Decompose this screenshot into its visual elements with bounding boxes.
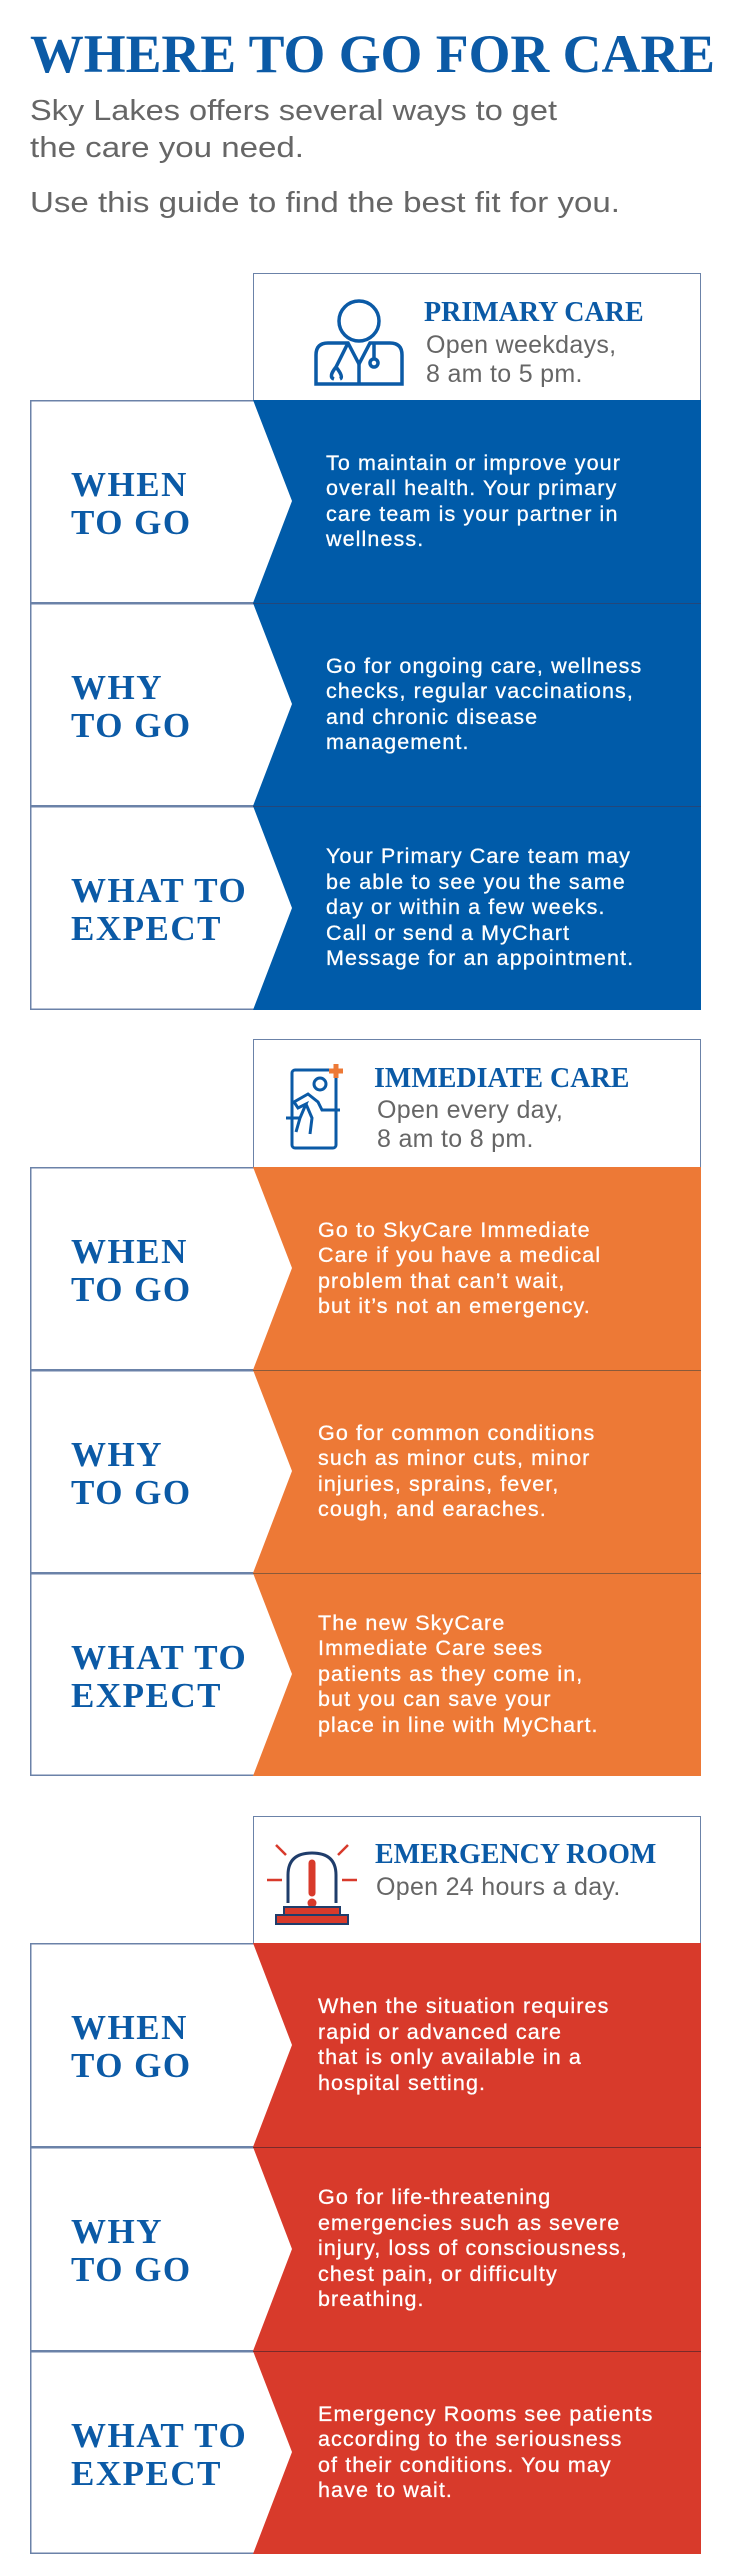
emergency room header: [253, 1816, 701, 1943]
hours: [377, 1096, 563, 1153]
row: why to go: management.: [326, 730, 470, 754]
row: why to go: injuries, sprains, fever,: [318, 1472, 559, 1496]
row: what to expect: have to wait.: [318, 2478, 453, 2502]
subtitle: [30, 95, 620, 219]
row: why to go: WHY: [71, 2212, 163, 2251]
hours: Open weekdays,: [426, 331, 616, 359]
row: when to go: When the situation requires: [318, 1994, 609, 2018]
header title: EMERGENCY ROOM: [375, 1839, 656, 1870]
row: why to go: chest pain, or difficulty: [318, 2262, 558, 2286]
row: when to go: hospital setting.: [318, 2070, 486, 2094]
header title: PRIMARY CARE: [424, 297, 644, 328]
row: why to go: TO GO: [71, 1472, 192, 1512]
hours: 8 am to 8 pm.: [377, 1125, 534, 1153]
row: when to go: TO GO: [71, 502, 192, 542]
row: what to expect: EXPECT: [71, 909, 222, 948]
row: what to expect: The new SkyCare: [318, 1611, 505, 1635]
row: when to go: Care if you have a medical: [318, 1243, 601, 1267]
row: when to go: TO GO: [71, 1270, 192, 1308]
hours: 8 am to 5 pm.: [426, 360, 583, 388]
row: what to expect: be able to see you the same: [326, 870, 626, 894]
row: when to go: but it’s not an emergency.: [318, 1294, 591, 1318]
row: why to go: TO GO: [71, 706, 192, 744]
title: WHERE TO GO FOR CARE: [30, 24, 715, 84]
row: what to expect: according to the seriousness: [318, 2427, 622, 2451]
row: what to expect: Emergency Rooms see patients: [318, 2402, 654, 2426]
row: why to go: [30, 603, 701, 806]
row: when to go: that is only available in a: [318, 2045, 582, 2069]
icon: siren: [267, 1844, 357, 1925]
header title: IMMEDIATE CARE: [374, 1063, 629, 1094]
row: when to go: rapid or advanced care: [318, 2020, 562, 2044]
row: when to go: TO GO: [71, 2046, 192, 2085]
panel: emergency room: [30, 1816, 701, 2554]
row: what to expect: day or within a few weeks.: [326, 895, 606, 919]
row: when to go: wellness.: [326, 527, 424, 551]
row: what to expect: EXPECT: [71, 2454, 222, 2492]
row: why to go: WHY: [71, 1434, 163, 1474]
row: when to go: To maintain or improve your: [326, 450, 621, 474]
panel: immediate care: [30, 1039, 701, 1776]
row: what to expect: EXPECT: [71, 1676, 222, 1714]
subtitle: Sky Lakes offers several ways to get: [30, 95, 557, 127]
row: why to go: WHY: [71, 668, 163, 706]
row: what to expect: Call or send a MyChart: [326, 921, 570, 945]
row: why to go: Go for common conditions: [318, 1420, 595, 1444]
row: what to expect: patients as they come in,: [318, 1662, 583, 1686]
row: why to go: breathing.: [318, 2287, 425, 2311]
row: what to expect: place in line with MyChart.: [318, 1713, 599, 1737]
row: why to go: Go for ongoing care, wellness: [326, 654, 642, 678]
row: why to go: emergencies such as severe: [318, 2211, 620, 2235]
row: when to go: WHEN: [71, 1232, 188, 1270]
row: what to expect: [30, 2351, 701, 2554]
row: why to go: Go for life-threatening: [318, 2185, 551, 2209]
row: why to go: [30, 2147, 701, 2351]
hours: Open 24 hours a day.: [376, 1873, 621, 1901]
primary care header: [253, 273, 701, 400]
row: why to go: such as minor cuts, minor: [318, 1446, 590, 1470]
hours: Open every day,: [377, 1096, 563, 1124]
row: when to go: [30, 1167, 701, 1370]
subtitle: the care you need.: [30, 132, 304, 164]
row: what to expect: WHAT TO: [71, 871, 247, 910]
row: when to go: WHEN: [71, 464, 188, 504]
row: why to go: TO GO: [71, 2250, 192, 2289]
row: when to go: overall health. Your primary: [326, 476, 617, 500]
subtitle: Use this guide to find the best fit for you.: [30, 187, 620, 219]
row: what to expect: Your Primary Care team may: [326, 844, 631, 868]
hours: [426, 331, 616, 388]
icon: doctor: [314, 299, 404, 386]
row: when to go: [30, 400, 701, 603]
row: why to go: checks, regular vaccinations,: [326, 679, 634, 703]
row: when to go: WHEN: [71, 2008, 188, 2047]
row: what to expect: WHAT TO: [71, 2416, 247, 2454]
row: when to go: care team is your partner in: [326, 502, 618, 526]
row: why to go: injury, loss of consciousness,: [318, 2236, 628, 2260]
row: why to go: [30, 1370, 701, 1573]
row: when to go: Go to SkyCare Immediate: [318, 1218, 591, 1242]
row: what to expect: but you can save your: [318, 1687, 551, 1711]
row: what to expect: of their conditions. You may: [318, 2452, 612, 2476]
panel: primary care: [30, 273, 701, 1010]
row: why to go: cough, and earaches.: [318, 1497, 547, 1521]
row: what to expect: WHAT TO: [71, 1638, 247, 1676]
row: what to expect: Immediate Care sees: [318, 1636, 543, 1660]
icon: door with running person: [286, 1064, 343, 1150]
row: when to go: problem that can’t wait,: [318, 1268, 565, 1292]
row: what to expect: Message for an appointment.: [326, 946, 634, 970]
row: what to expect: [30, 806, 701, 1010]
row: what to expect: [30, 1573, 701, 1776]
row: when to go: [30, 1943, 701, 2147]
row: why to go: and chronic disease: [326, 704, 538, 728]
immediate care header: [253, 1039, 701, 1167]
